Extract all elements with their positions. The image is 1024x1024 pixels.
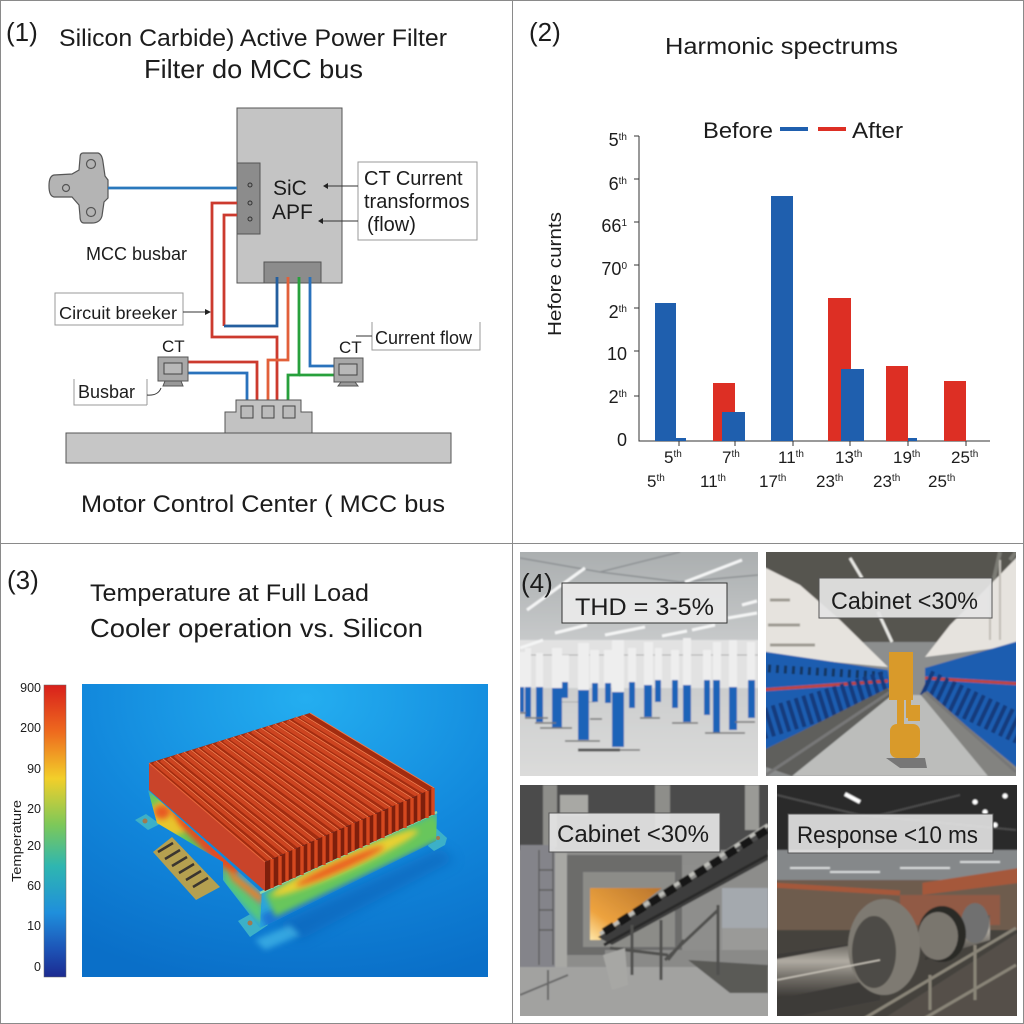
x axis labels [647, 448, 978, 491]
legend: After [852, 118, 903, 143]
fin faces [154, 716, 425, 860]
callout: CT current transformers [318, 162, 477, 240]
callout: CT current transformers: (flow) [367, 214, 416, 236]
panel 1: circuit diagram [6, 17, 480, 518]
x axis labels: 17 [759, 472, 778, 491]
caption panel 1: Motor Control Center ( MCC bus [81, 491, 445, 518]
callout: circuit breaker [55, 293, 211, 325]
floor [792, 695, 988, 776]
y axis labels: 5 [609, 130, 619, 150]
callout: circuit breaker: Circuit breeker [59, 303, 177, 323]
panel 4: application photographs [515, 547, 1022, 1021]
blue frames [760, 651, 890, 752]
legend: Before [703, 118, 773, 143]
y axis labels: 6 [609, 174, 619, 194]
x axis labels: th [892, 473, 900, 484]
y axis labels: 2 [609, 302, 619, 322]
title panel 3 [90, 580, 423, 643]
x axis labels: 23 [816, 472, 835, 491]
x axis labels: 25 [928, 472, 947, 491]
x axis labels: th [673, 449, 682, 460]
label: THD [562, 583, 727, 623]
photo: textile hall with THD label [515, 547, 763, 782]
conveyor [598, 833, 768, 945]
label: cabinet top [819, 578, 992, 618]
temperature colour scale: 900 [20, 681, 41, 695]
thermal render of heat sink [82, 684, 488, 977]
x axis labels: th [796, 449, 804, 460]
temperature colour scale: 60 [27, 879, 41, 893]
panel 3: thermal image [7, 565, 488, 977]
icon: left CT: CT [162, 337, 185, 356]
x axis labels: 5 [664, 448, 673, 467]
shaft [777, 946, 860, 994]
temperature colour scale: 200 [20, 721, 41, 735]
fin ends [265, 788, 434, 891]
base right side thermal map [260, 814, 437, 928]
icon: left CT [158, 337, 188, 386]
SiC APF cabinet [237, 108, 342, 283]
temperature colour scale [10, 681, 66, 977]
x axis labels: 13 [835, 448, 854, 467]
photo: steel mill shaft [772, 780, 1022, 1021]
y axis labels [601, 130, 627, 450]
x axis labels: 11 [700, 472, 718, 491]
white bobbins [760, 565, 888, 667]
x axis labels: 7 [722, 448, 731, 467]
y axis labels: th [619, 389, 627, 400]
x axis labels: th [778, 473, 786, 484]
legend [703, 118, 903, 143]
first fin side face [149, 763, 265, 891]
label: THD: THD = 3-5% [575, 594, 714, 621]
temperature colour scale: 0 [34, 960, 41, 974]
x axis labels: th [912, 449, 920, 460]
x axis labels: 5 [647, 472, 656, 491]
bars [655, 196, 966, 441]
title panel 3: Temperature at Full Load [90, 580, 369, 607]
temperature colour scale: Temperature [10, 800, 24, 882]
axis title: Hefore curnts [545, 212, 565, 336]
callout: current flow: Current flow [375, 328, 473, 348]
motor control center bus bar [66, 433, 451, 463]
callout: CT current transformers: CT Current [364, 168, 463, 190]
y axis labels: 0 [621, 261, 627, 272]
shadow [282, 849, 450, 938]
bus connector block [225, 400, 312, 433]
y axis labels: 0 [617, 430, 627, 450]
title panel 1: Filter do MCC bus [144, 54, 363, 84]
label: MCC busbar: MCC busbar [86, 244, 187, 264]
x axis labels: th [656, 473, 665, 484]
panel number 3: (3) [7, 565, 39, 595]
x axis labels: 23 [873, 472, 892, 491]
y axis labels: 66 [601, 216, 621, 236]
x axis labels: th [947, 473, 955, 484]
photo: spinning frames with robot [760, 547, 1022, 781]
base left side thermal map [148, 790, 262, 928]
label: response [788, 814, 993, 853]
icon: right CT [334, 338, 363, 386]
label: cabinet bottom: Cabinet <30% [557, 821, 709, 848]
title panel 3: Cooler operation vs. Silicon [90, 613, 423, 643]
temperature colour scale: 20 [27, 839, 41, 853]
x axis labels: th [835, 473, 843, 484]
x axis labels: 11 [778, 448, 796, 467]
heat sink fin block [149, 713, 434, 862]
mounting tabs [135, 814, 160, 830]
temperature colour scale: 10 [27, 919, 41, 933]
callout: CT current transformers: transformos [364, 191, 470, 213]
photo: furnace and conveyor [515, 780, 773, 1021]
SiC APF cabinet: SiC [273, 177, 307, 200]
railing [860, 928, 1016, 1021]
x axis labels: th [854, 449, 862, 460]
title panel 1 [59, 25, 447, 84]
panel number 1: (1) [6, 17, 38, 47]
x axis labels: th [718, 473, 726, 484]
wiring [108, 188, 334, 400]
y axis labels: 10 [607, 344, 627, 364]
y axis labels: th [619, 176, 627, 187]
label: response: Response <10 ms [797, 822, 978, 849]
SiC APF cabinet: APF [272, 201, 313, 224]
panel number 2: (2) [529, 17, 561, 47]
robot arm [889, 652, 920, 758]
icon: MCC busbar connector [49, 153, 108, 223]
panel 2: harmonic spectrum chart [529, 17, 990, 491]
x axis labels: th [731, 449, 740, 460]
icon: right CT: CT [339, 338, 362, 357]
temperature colour scale: 20 [27, 802, 41, 816]
label: cabinet bottom [549, 813, 720, 852]
y axis labels: 70 [601, 259, 621, 279]
x axis labels: 25 [951, 448, 970, 467]
callout: busbar [74, 379, 161, 405]
temperature colour scale: 90 [27, 762, 41, 776]
y axis labels: th [619, 132, 627, 143]
fin top edges [156, 713, 434, 859]
x axis labels: th [970, 449, 978, 460]
connector pins [153, 837, 220, 900]
y axis labels: 2 [609, 387, 619, 407]
axes [634, 136, 990, 446]
y axis labels: 1 [621, 218, 627, 229]
label: cabinet top: Cabinet <30% [831, 588, 978, 615]
x axis labels: 19 [893, 448, 912, 467]
callout: current flow [356, 322, 480, 350]
title panel 1: Silicon Carbide) Active Power Filter [59, 25, 447, 52]
panel number 4: (4) [521, 568, 553, 598]
y axis labels: th [619, 304, 627, 315]
title panel 2: Harmonic spectrums [665, 33, 898, 59]
callout: busbar: Busbar [78, 382, 135, 402]
